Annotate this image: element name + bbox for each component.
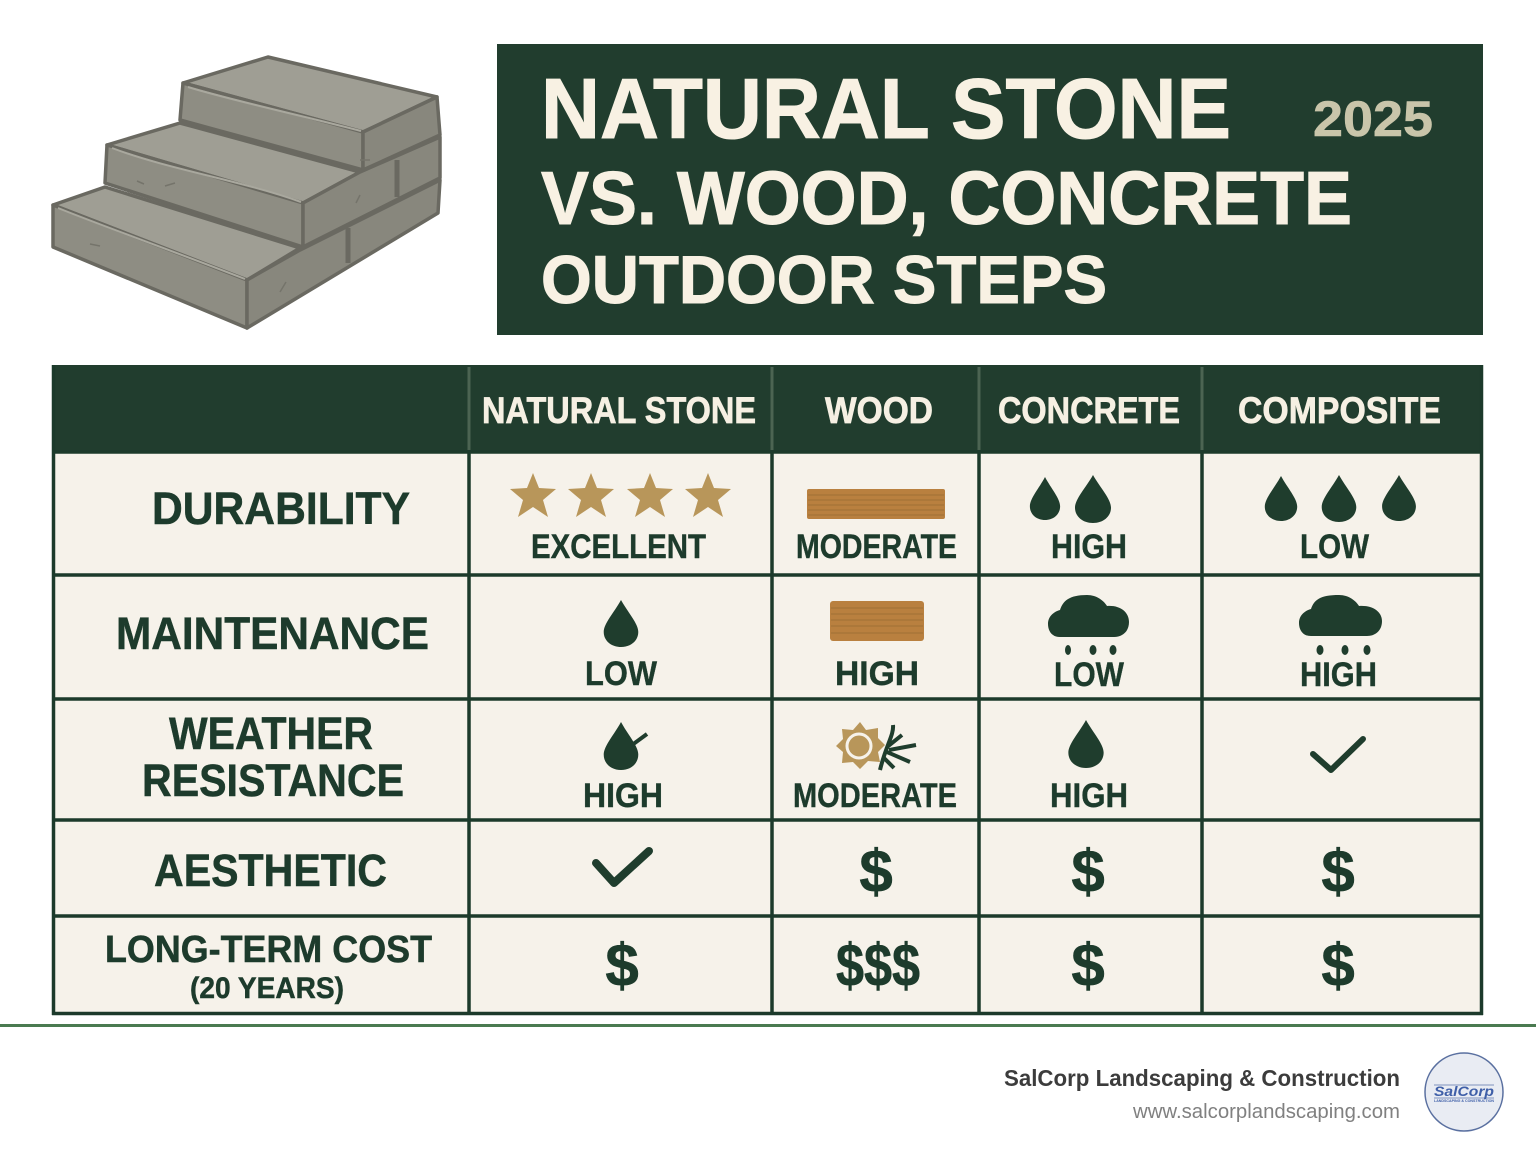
value: excellent: EXCELLENT bbox=[531, 528, 706, 566]
value: low: LOW bbox=[585, 655, 657, 693]
value: high: HIGH bbox=[835, 655, 919, 693]
icon: sun and branches bbox=[836, 722, 916, 770]
cost: wood aesthetic: $ bbox=[859, 838, 893, 905]
logo tagline: LANDSCAPING & CONSTRUCTION bbox=[1434, 1098, 1494, 1103]
icon: wood plank bbox=[807, 489, 945, 519]
icon: drop with tick bbox=[604, 722, 647, 770]
illustration: stone steps bbox=[53, 57, 440, 328]
cost: wood: $$$ bbox=[836, 932, 920, 999]
title line 3: OUTDOOR STEPS bbox=[541, 242, 1107, 318]
value: moderate: MODERATE bbox=[796, 528, 957, 566]
row label: maintenance: MAINTENANCE bbox=[116, 608, 429, 659]
comparison table bbox=[52, 365, 1483, 1015]
icon: drop bbox=[604, 600, 638, 647]
value: low: LOW bbox=[1054, 656, 1124, 694]
cost: composite aesthetic: $ bbox=[1321, 838, 1355, 905]
icon: four stars bbox=[510, 473, 731, 517]
row label: weather resistance: RESISTANCE bbox=[142, 755, 404, 806]
header: natural stone: NATURAL STONE bbox=[482, 390, 756, 431]
icon: three drops bbox=[1265, 475, 1416, 522]
row label: aesthetic: AESTHETIC bbox=[154, 845, 387, 896]
panel: title banner bbox=[497, 44, 1483, 335]
cost: natural stone: $ bbox=[605, 932, 639, 999]
footer: website: www.salcorplandscaping.com bbox=[1132, 1101, 1400, 1123]
icon: wood block bbox=[830, 601, 924, 641]
icon: two drops bbox=[1030, 475, 1111, 523]
logo wordmark: SalCorp bbox=[1434, 1083, 1494, 1099]
row label: durability: DURABILITY bbox=[152, 483, 410, 534]
icon: checkmark bbox=[1313, 739, 1363, 770]
header: concrete: CONCRETE bbox=[998, 390, 1180, 431]
header: wood: WOOD bbox=[825, 390, 933, 431]
title line 1: NATURAL STONE bbox=[541, 62, 1231, 157]
value: high: HIGH bbox=[1050, 777, 1128, 815]
icon: rain cloud bbox=[1048, 595, 1129, 655]
footer: company name: SalCorp Landscaping & Construction bbox=[1004, 1065, 1400, 1091]
value: low: LOW bbox=[1300, 528, 1369, 566]
logo badge bbox=[1425, 1053, 1503, 1131]
header: composite: COMPOSITE bbox=[1238, 390, 1441, 431]
cost: concrete aesthetic: $ bbox=[1071, 838, 1105, 905]
icon: checkmark bbox=[596, 851, 649, 883]
table header band bbox=[52, 365, 1483, 452]
value: high: HIGH bbox=[1300, 656, 1377, 694]
year: 2025 bbox=[1313, 91, 1433, 147]
row label: weather resistance: WEATHER bbox=[169, 708, 373, 759]
value: moderate: MODERATE bbox=[793, 777, 957, 815]
row label: long-term cost: LONG-TERM COST bbox=[105, 929, 432, 971]
title line 2: VS. WOOD, CONCRETE bbox=[541, 156, 1352, 240]
value: high: HIGH bbox=[583, 777, 663, 815]
value: high: HIGH bbox=[1051, 528, 1127, 566]
icon: rain cloud bbox=[1299, 595, 1382, 655]
cost: composite: $ bbox=[1321, 932, 1355, 999]
footer divider bbox=[0, 1024, 1536, 1027]
cost: concrete: $ bbox=[1071, 932, 1105, 999]
row label: long-term cost bbox=[105, 929, 432, 1005]
icon: drop bbox=[1068, 720, 1104, 768]
row label: long-term cost: (20 YEARS) bbox=[190, 972, 344, 1005]
table background bbox=[52, 365, 1483, 1015]
row label: weather resistance bbox=[142, 708, 404, 806]
